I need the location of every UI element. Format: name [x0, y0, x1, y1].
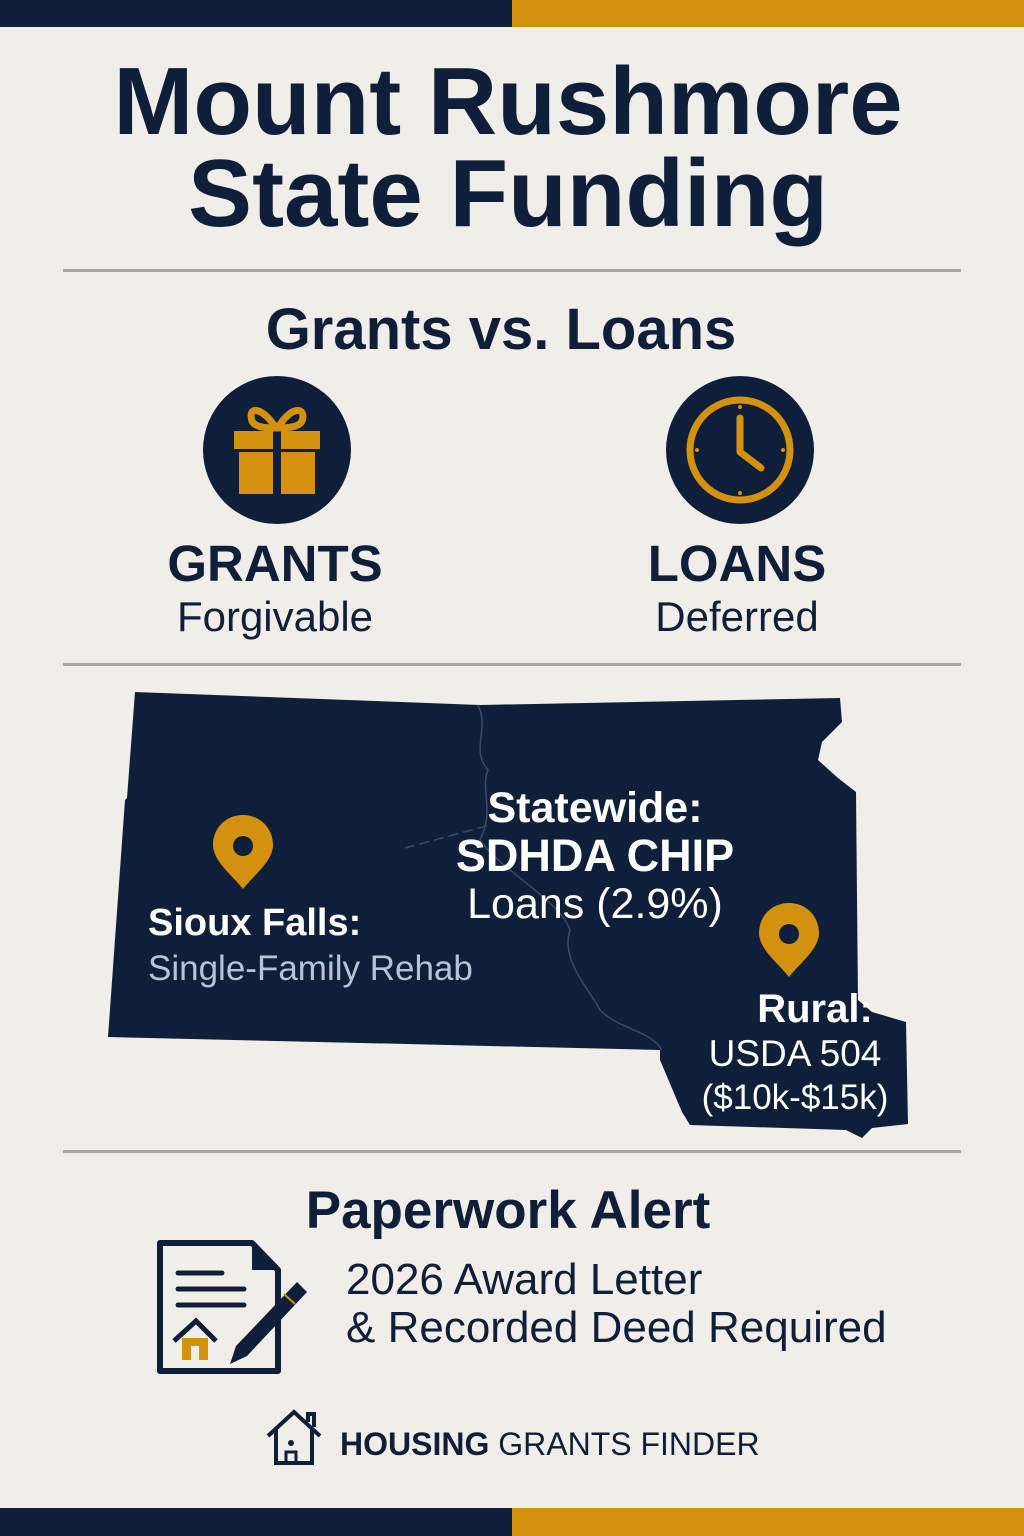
heading: grants vs loans: Grants vs. Loans	[266, 297, 736, 362]
label: sioux falls: Sioux Falls:	[148, 902, 361, 944]
label: rural	[702, 987, 888, 1117]
label: statewide: Statewide:	[487, 784, 703, 832]
title: State Funding	[188, 140, 828, 247]
label: rural: Rural:	[757, 987, 873, 1031]
label: rural: ($10k-$15k)	[702, 1078, 888, 1117]
text: paperwork requirements: 2026 Award Letter	[346, 1255, 702, 1304]
loans label	[648, 535, 826, 640]
icon: document with pencil	[157, 1240, 307, 1374]
text: paperwork requirements	[346, 1255, 887, 1352]
pin: sioux falls	[213, 815, 273, 889]
loans label: Deferred	[655, 593, 819, 640]
footer brand: HOUSING GRANTS FINDER	[340, 1426, 760, 1462]
label: statewide	[456, 784, 734, 928]
pin: rural	[759, 903, 819, 977]
loans label: LOANS	[648, 535, 826, 592]
map: south dakota	[108, 692, 908, 1138]
label: statewide: SDHDA CHIP	[456, 830, 734, 881]
grants label: Forgivable	[177, 593, 373, 640]
label: rural: USDA 504	[709, 1033, 881, 1074]
label: statewide: Loans (2.9%)	[467, 880, 723, 928]
top bar	[0, 0, 1024, 27]
grants label	[167, 535, 383, 640]
text: paperwork requirements: & Recorded Deed Required	[346, 1303, 887, 1352]
title: Mount Rushmore	[113, 48, 903, 155]
bottom bar	[0, 1508, 1024, 1536]
heading: paperwork alert: Paperwork Alert	[306, 1181, 710, 1240]
icon: clock	[666, 376, 814, 524]
label: sioux falls: Single-Family Rehab	[148, 949, 473, 988]
label: sioux falls	[148, 902, 473, 988]
icon: gift	[203, 376, 351, 524]
title	[113, 48, 903, 247]
footer brand	[266, 1409, 760, 1465]
grants label: GRANTS	[167, 535, 383, 592]
